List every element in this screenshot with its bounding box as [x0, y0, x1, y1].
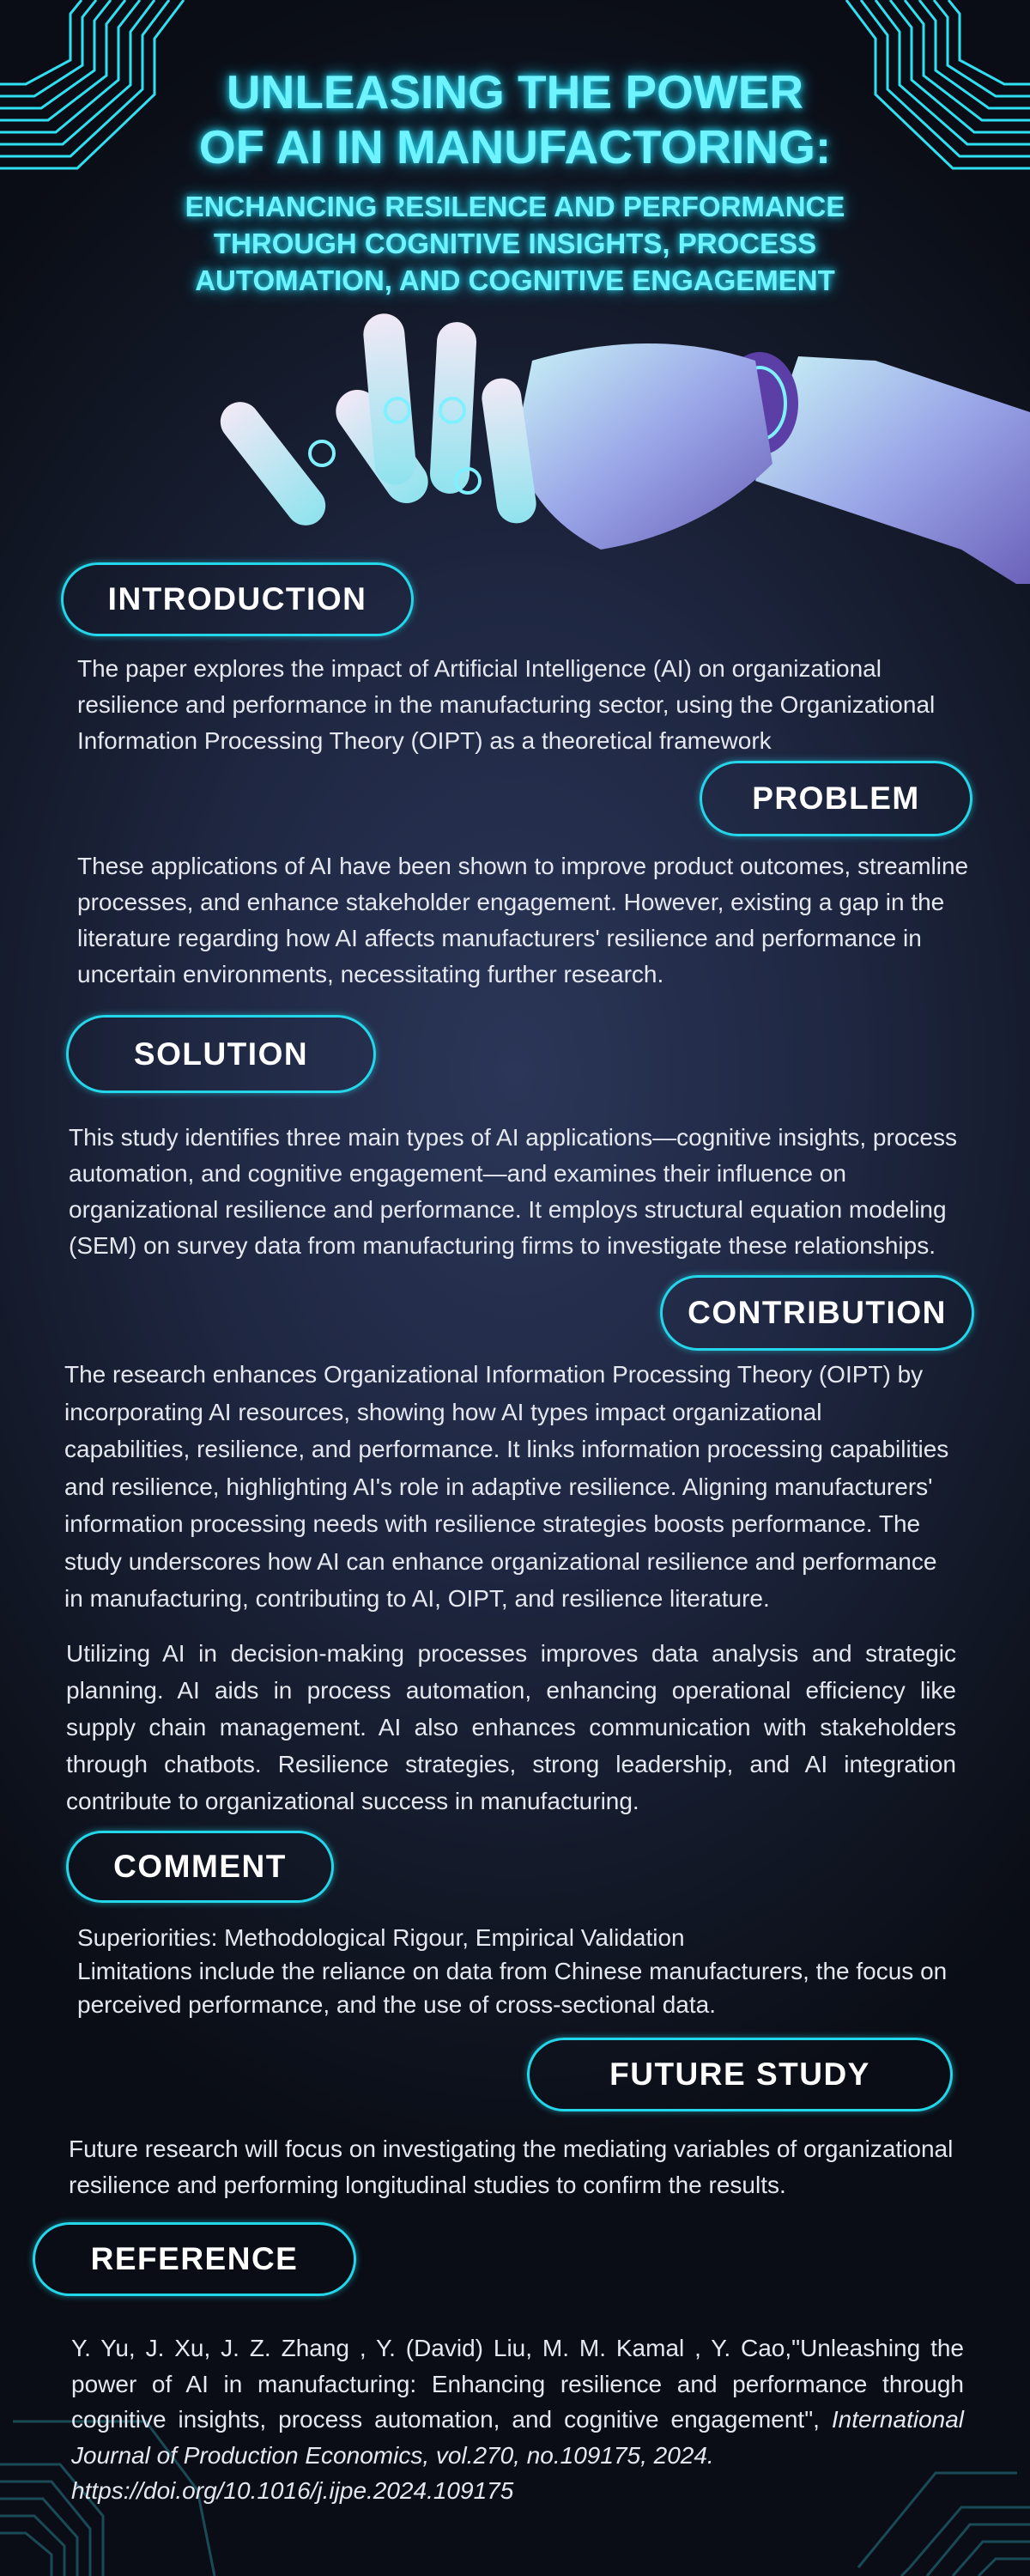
text: introduction	[77, 655, 935, 754]
heading: solution	[66, 1015, 376, 1093]
text: contribution: in manufacturing, contributing to AI, OIPT, and resilience literature.	[64, 1585, 770, 1612]
heading: reference	[33, 2222, 356, 2296]
heading: comment: COMMENT	[113, 1849, 287, 1884]
title	[191, 64, 834, 174]
text: solution: automation, and cognitive engagement—and examines their influence on	[69, 1160, 846, 1187]
heading: contribution	[660, 1275, 974, 1351]
subtitle: ENCHANCING RESILENCE AND PERFORMANCE	[185, 191, 845, 222]
robotic hand illustration	[220, 313, 1030, 584]
text: problem: literature regarding how AI affects manufacturers' resilience and performance in	[77, 925, 922, 951]
title: OF AI IN MANUFACTORING:	[199, 120, 831, 173]
text: future study: Future research will focus on investigating the mediating variables of organizational	[69, 2136, 953, 2162]
text: contribution: study underscores how AI can enhance organizational resilience and performance	[64, 1547, 936, 1575]
text: problem: These applications of AI have been shown to improve product outcomes, streamline	[77, 853, 968, 879]
heading: future study	[527, 2038, 953, 2111]
heading: contribution: CONTRIBUTION	[688, 1295, 947, 1330]
heading: problem: PROBLEM	[752, 781, 920, 816]
text: solution	[69, 1124, 957, 1259]
text: contribution	[64, 1361, 948, 1612]
text: reference: https://doi.org/10.1016/j.ijpe.2024.109175	[71, 2477, 513, 2504]
text: introduction: resilience and performance in the manufacturing sector, using the Organizational	[77, 691, 935, 718]
heading: reference: REFERENCE	[91, 2241, 298, 2276]
text: contribution paragraph 2	[66, 1640, 956, 1814]
text: contribution paragraph 2: supply chain management. AI also enhances communication with stakeholders	[66, 1714, 956, 1741]
text: introduction: The paper explores the impact of Artificial Intelligence (AI) on organizational	[77, 655, 882, 682]
subtitle: THROUGH COGNITIVE INSIGHTS, PROCESS	[214, 228, 816, 259]
text: solution: organizational resilience and performance. It employs structural equation modeling	[69, 1196, 947, 1223]
text: reference: cognitive insights, process automation, and cognitive engagement", International	[71, 2406, 964, 2433]
circuit decoration: bottom	[0, 2420, 1030, 2576]
text: future study: resilience and performing longitudinal studies to confirm the results.	[69, 2172, 786, 2198]
text: contribution: The research enhances Organizational Information Processing Theory (OIPT) by	[64, 1361, 923, 1388]
text: problem	[77, 853, 968, 987]
text: comment: Limitations include the reliance on data from Chinese manufacturers, the focus on	[77, 1958, 947, 1984]
heading: comment	[66, 1831, 334, 1903]
text: contribution: information processing needs with resilience strategies boosts performance. The	[64, 1510, 920, 1537]
text: comment: Superiorities: Methodological Rigour, Empirical Validation	[77, 1924, 685, 1951]
text: reference: Y. Yu, J. Xu, J. Z. Zhang , Y. (David) Liu, M. M. Kamal , Y. Cao,"Unleashing the	[71, 2335, 964, 2361]
title: UNLEASING THE POWER	[227, 65, 803, 118]
text: problem: processes, and enhance stakeholder engagement. However, existing a gap in the	[77, 889, 944, 915]
text: contribution paragraph 2: Utilizing AI in decision-making processes improves data analysis and strategic	[66, 1640, 956, 1667]
text: contribution: capabilities, resilience, and performance. It links information processing capabilities	[64, 1436, 948, 1462]
circuit decoration: top left	[0, 0, 185, 170]
text: reference: power of AI in manufacturing: Enhancing resilience and performance through	[71, 2370, 964, 2397]
text: contribution: and resilience, highlighting AI's role in adaptive resilience. Aligning manufacturers'	[64, 1473, 932, 1499]
text: comment	[77, 1924, 947, 2018]
heading: problem	[700, 761, 972, 836]
circuit decoration: top right	[845, 0, 1030, 170]
text: reference	[71, 2335, 965, 2504]
heading: future study: FUTURE STUDY	[609, 2057, 870, 2092]
text: contribution paragraph 2: through chatbots. Resilience strategies, strong leadership, and AI integration	[66, 1751, 956, 1777]
text: problem: uncertain environments, necessitating further research.	[77, 961, 663, 987]
heading: introduction	[61, 562, 414, 636]
text: contribution paragraph 2: planning. AI aids in process automation, enhancing operational efficiency like	[66, 1677, 956, 1704]
subtitle: AUTOMATION, AND COGNITIVE ENGAGEMENT	[195, 264, 835, 296]
text: solution: This study identifies three main types of AI applications—cognitive insights, process	[69, 1124, 957, 1151]
text: comment: perceived performance, and the use of cross-sectional data.	[77, 1991, 716, 2018]
text: reference: Journal of Production Economics, vol.270, no.109175, 2024.	[71, 2442, 714, 2468]
text: introduction: Information Processing Theory (OIPT) as a theoretical framework	[77, 727, 772, 754]
text: solution: (SEM) on survey data from manufacturing firms to investigate these relationships.	[69, 1232, 936, 1259]
heading: introduction: INTRODUCTION	[108, 581, 367, 617]
subtitle	[176, 185, 851, 301]
text: contribution: incorporating AI resources, showing how AI types impact organizational	[64, 1398, 821, 1425]
text: future study	[69, 2136, 953, 2198]
text: contribution paragraph 2: contribute to organizational success in manufacturing.	[66, 1788, 639, 1814]
heading: solution: SOLUTION	[134, 1036, 308, 1072]
